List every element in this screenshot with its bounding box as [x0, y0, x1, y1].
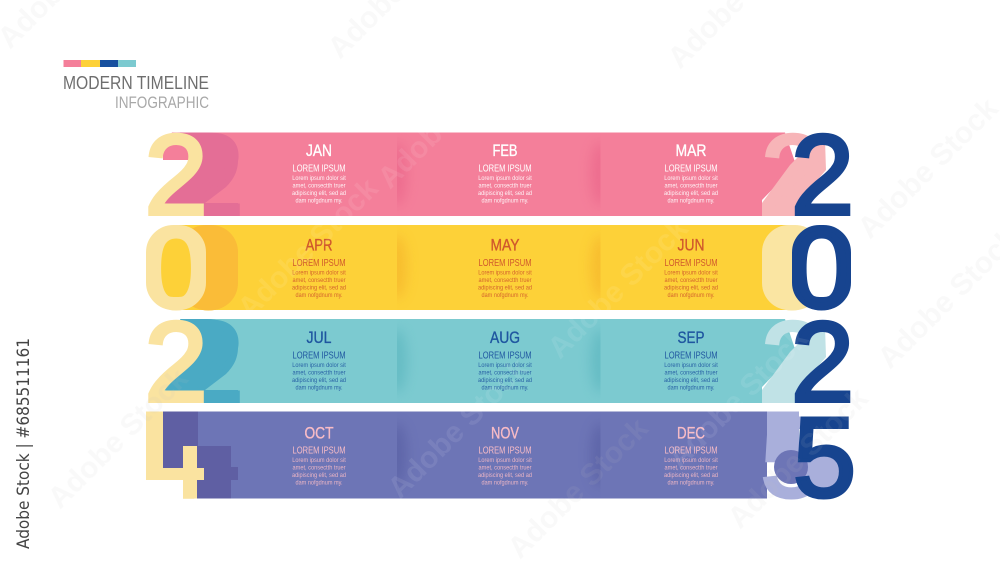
December: Lorem ipsum dolor sit [664, 457, 718, 464]
September: Lorem ipsum dolor sit [664, 362, 718, 369]
May [478, 236, 532, 299]
stock watermark on white: Adobe Stock [502, 412, 655, 565]
February [478, 142, 532, 204]
panel shadows [397, 428, 600, 482]
March: dam nofgdnum my. [668, 198, 715, 204]
panel shadows [397, 146, 600, 202]
May: dam nofgdnum my. [482, 292, 529, 299]
October: LOREM IPSUM [292, 446, 346, 456]
faded filled digit 0: 0 [761, 206, 823, 332]
May: Lorem ipsum dolor sit [478, 270, 532, 276]
shadow digit 2: 2 [181, 112, 243, 238]
band [150, 319, 796, 403]
navy digit 0: 0 [790, 206, 853, 332]
October: adipiscing elit, sed ad [292, 472, 346, 479]
August [478, 329, 532, 392]
October: dam nofgdnum my. [296, 480, 343, 486]
February: LOREM IPSUM [478, 164, 532, 174]
September: SEP [678, 329, 704, 347]
January: Lorem ipsum dolor sit [292, 175, 346, 182]
June: adipiscing elit, sed ad [664, 284, 718, 292]
November: amet, consectth truer [478, 464, 532, 472]
October: amet, consectth truer [292, 464, 346, 472]
colour key bars [64, 60, 136, 67]
July [292, 329, 346, 392]
stock watermark on bands: Adobe Stock [542, 212, 695, 365]
navy digit 2: 2 [791, 299, 854, 425]
January: adipiscing elit, sed ad [292, 190, 346, 197]
title block [63, 60, 209, 112]
January: dam nofgdnum my. [296, 198, 343, 204]
row 2: Apr to Jun [146, 225, 851, 310]
March: amet, consectth truer [664, 182, 718, 190]
August: Lorem ipsum dolor sit [478, 362, 532, 369]
July: amet, consectth truer [292, 370, 346, 376]
July: JUL [306, 329, 332, 347]
September [664, 329, 718, 392]
April: Lorem ipsum dolor sit [292, 270, 346, 276]
digit 4: 4 [144, 394, 206, 520]
heading: MODERN TIMELINE [63, 73, 209, 93]
April: APR [306, 236, 333, 254]
bowl fill of navy 5 [800, 446, 844, 494]
infographic canvas [16, 60, 854, 549]
stock watermark on bands: Adobe Stock [232, 172, 385, 325]
July: Lorem ipsum dolor sit [292, 362, 346, 369]
faded digit 5: 5 [761, 394, 823, 520]
October [292, 424, 346, 486]
November [478, 424, 532, 486]
July: adipiscing elit, sed ad [292, 377, 346, 384]
July: LOREM IPSUM [292, 350, 346, 362]
row 4: Oct to Dec [146, 412, 854, 500]
June: Lorem ipsum dolor sit [664, 270, 718, 276]
shadow digit 2 [165, 319, 240, 403]
digit 2: 2 [145, 299, 207, 425]
May: adipiscing elit, sed ad [478, 284, 532, 292]
December: adipiscing elit, sed ad [664, 472, 718, 479]
November: adipiscing elit, sed ad [478, 472, 532, 479]
June: LOREM IPSUM [664, 258, 718, 269]
June: JUN [678, 236, 704, 254]
December [664, 424, 718, 486]
August: amet, consectth truer [478, 370, 532, 376]
June: dam nofgdnum my. [668, 292, 715, 299]
November: dam nofgdnum my. [482, 480, 529, 486]
February: amet, consectth truer [478, 182, 532, 190]
April [292, 236, 346, 299]
panel shadows [397, 331, 600, 392]
October: OCT [304, 424, 334, 442]
February: dam nofgdnum my. [482, 198, 529, 204]
January: amet, consectth truer [292, 182, 346, 190]
shadow digit 2 [165, 132, 240, 216]
May: MAY [490, 236, 520, 254]
August: LOREM IPSUM [478, 350, 532, 362]
shadow digit 4 [163, 412, 238, 498]
January [292, 142, 346, 204]
May: amet, consectth truer [478, 277, 532, 284]
stock id caption: Adobe Stock | #685511161 [14, 338, 34, 549]
November: Lorem ipsum dolor sit [478, 457, 532, 464]
September: amet, consectth truer [664, 370, 718, 376]
digit 0: 0 [145, 206, 207, 332]
stock watermark on white: Adobe Stock [722, 382, 875, 535]
digit 4 [146, 412, 204, 499]
April: adipiscing elit, sed ad [292, 284, 346, 292]
row 1: Jan to Mar [148, 132, 850, 216]
March: Lorem ipsum dolor sit [664, 175, 718, 182]
navy digit 2: 2 [791, 112, 854, 238]
February: FEB [492, 142, 518, 160]
March: MAR [676, 142, 707, 160]
stock watermark on bands [232, 42, 815, 505]
September: LOREM IPSUM [664, 350, 718, 362]
February: adipiscing elit, sed ad [478, 190, 532, 197]
navy digit 5: 5 [793, 394, 856, 520]
shadow digit 2: 2 [181, 299, 243, 425]
March [664, 142, 718, 204]
December: amet, consectth truer [664, 464, 718, 472]
September: dam nofgdnum my. [668, 384, 715, 392]
December: DEC [677, 424, 705, 442]
August: dam nofgdnum my. [482, 384, 529, 392]
row 3: Jul to Sep [148, 319, 850, 403]
March: LOREM IPSUM [664, 164, 718, 174]
stock watermark on bands: Adobe Stock [372, 42, 525, 195]
December: LOREM IPSUM [664, 446, 718, 456]
October: Lorem ipsum dolor sit [292, 457, 346, 464]
stock watermark on bands: Adobe Stock [382, 352, 535, 505]
stock watermark on white: Adobe Stock [42, 362, 195, 515]
April: amet, consectth truer [292, 277, 346, 284]
subheading: INFOGRAPHIC [115, 93, 209, 112]
band [158, 225, 792, 310]
September: adipiscing elit, sed ad [664, 377, 718, 384]
June: amet, consectth truer [664, 277, 718, 284]
July: dam nofgdnum my. [296, 384, 343, 392]
December: dam nofgdnum my. [668, 480, 715, 486]
April: LOREM IPSUM [292, 258, 346, 269]
January: LOREM IPSUM [292, 164, 346, 174]
shadow digit 0: 0 [177, 206, 240, 332]
counter circle [774, 450, 808, 484]
band [163, 412, 767, 498]
April: dam nofgdnum my. [296, 292, 343, 299]
digit 2: 2 [145, 112, 207, 238]
faded digit 2: 2 [761, 112, 824, 238]
faded digit 2: 2 [761, 299, 824, 425]
August: AUG [490, 329, 520, 347]
February: Lorem ipsum dolor sit [478, 175, 532, 182]
August: adipiscing elit, sed ad [478, 377, 532, 384]
January: JAN [306, 142, 332, 160]
panel shadows [397, 238, 600, 296]
November: LOREM IPSUM [478, 446, 532, 456]
November: NOV [491, 424, 519, 442]
March: adipiscing elit, sed ad [664, 190, 718, 197]
band [150, 132, 796, 216]
June [664, 236, 718, 299]
stock watermark on bands: Adobe Stock [662, 322, 815, 475]
May: LOREM IPSUM [478, 258, 532, 269]
